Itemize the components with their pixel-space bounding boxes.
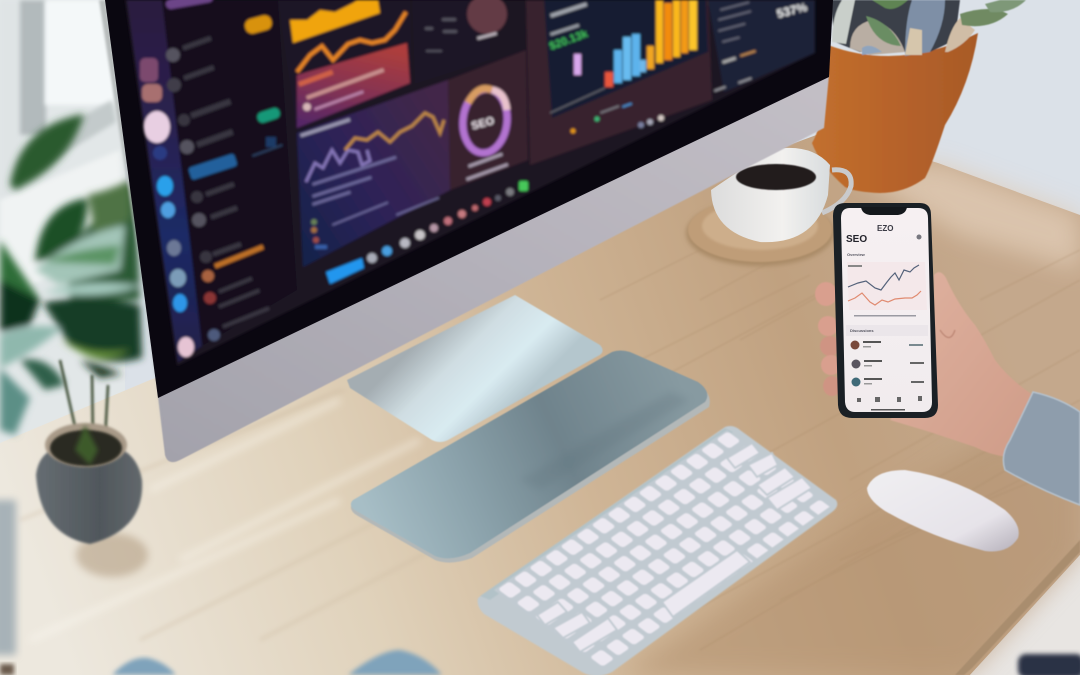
mouse <box>867 470 1019 551</box>
donut panel <box>448 50 528 190</box>
monitor stand base <box>351 350 710 563</box>
chart legend lines <box>311 156 439 249</box>
panel heading <box>300 118 351 137</box>
phone <box>833 203 938 418</box>
sidebar status pills <box>243 14 283 157</box>
top charts panel <box>278 0 412 132</box>
foreground blurred objects <box>0 500 1080 675</box>
keyboard <box>478 426 837 675</box>
dashboard screen <box>125 0 815 366</box>
phone list section <box>846 325 928 410</box>
SEO donut gauge: SEO <box>470 115 496 133</box>
right stats panel <box>708 0 815 92</box>
monitor black bezel <box>105 0 833 398</box>
yellow area chart <box>290 0 380 43</box>
hand holding phone <box>815 272 1033 457</box>
phone SEO heading: SEO <box>846 234 867 245</box>
monitor left edge <box>99 0 165 458</box>
lavender line <box>306 150 370 182</box>
stats ticks <box>425 18 457 52</box>
revenue figure: $20.13k <box>548 28 590 53</box>
bar chart panel <box>526 0 712 165</box>
phone title: EZO <box>877 224 893 233</box>
monitor <box>99 0 833 462</box>
orange trend line <box>297 12 406 72</box>
brown gauge badge <box>467 0 507 34</box>
donut caption <box>466 153 508 181</box>
percentage figure: 537% <box>775 0 809 21</box>
sidebar icon strip <box>127 0 202 362</box>
sidebar menu panel <box>162 0 297 346</box>
sidebar icons <box>140 0 214 357</box>
purple line chart panel <box>297 80 450 267</box>
icon: green houseplant and grey pot <box>0 114 148 577</box>
small stats panel <box>412 0 490 84</box>
phone section label: Overview <box>847 252 866 257</box>
plant stems and leaves <box>832 0 1026 56</box>
phone line chart <box>847 262 927 316</box>
red panel text bars <box>298 68 384 111</box>
orange wave line <box>345 113 444 150</box>
stats caption <box>477 32 497 40</box>
phone bell icon <box>916 234 922 240</box>
bar chart <box>550 0 697 113</box>
SEO donut gauge <box>460 87 510 155</box>
red gradient panel <box>297 43 410 128</box>
monitor silver chin <box>158 75 829 462</box>
sidebar rows <box>166 36 270 341</box>
right stats rows <box>718 1 756 64</box>
monitor stand neck <box>347 295 603 442</box>
grey knit sleeve <box>1003 392 1080 505</box>
revenue figure <box>548 2 590 53</box>
icon: terracotta plant pot with leaves <box>812 0 1026 193</box>
footer controls <box>326 77 752 284</box>
phone screen <box>841 208 932 412</box>
icon: coffee cup on wooden saucer <box>686 148 851 266</box>
phone list section: Discussions <box>850 328 874 333</box>
keyboard wide keys <box>537 443 812 652</box>
phone notch <box>861 207 907 215</box>
